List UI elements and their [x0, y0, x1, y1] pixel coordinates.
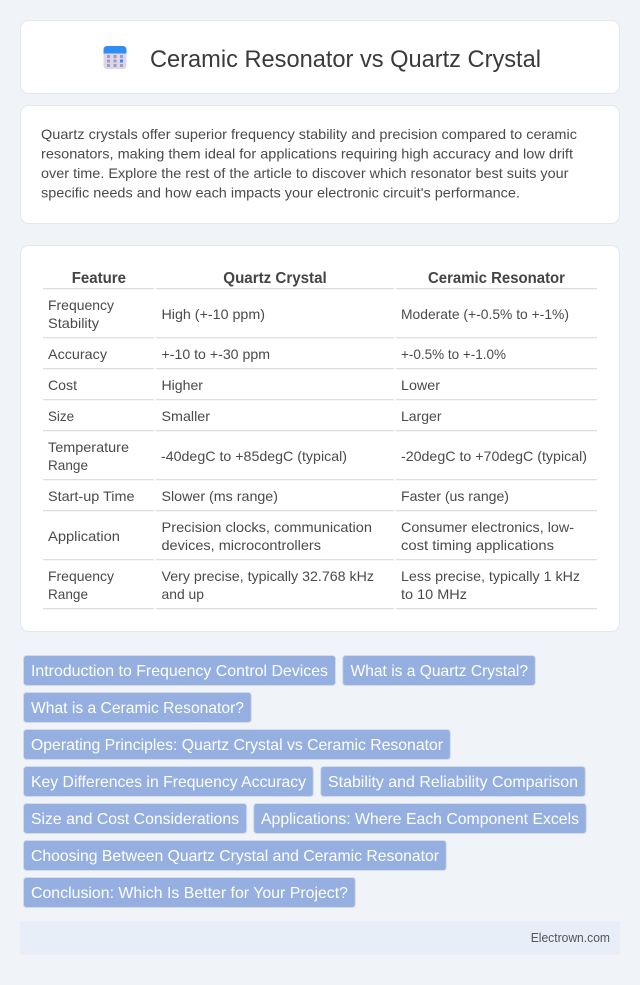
- tag: Stability and Reliability Comparison: [328, 774, 578, 791]
- row: cost: [48, 377, 440, 393]
- row: frequency stability: Stability: [48, 315, 99, 331]
- tag: [24, 730, 450, 760]
- row: start-up time: [48, 488, 509, 504]
- tag: Applications: Where Each Component Excels: [261, 811, 579, 828]
- row: frequency range: Range: [48, 586, 88, 602]
- row: start-up time: Start-up Time: [48, 488, 135, 504]
- tag: What is a Quartz Crystal?: [350, 663, 528, 680]
- row: frequency range: Less precise, typically 1 kHz: [401, 568, 580, 584]
- text block: introduction: Quartz crystals offer superior frequency stability and precision compared to ceramic: [41, 126, 577, 142]
- row: accuracy: +-10 to +-30 ppm: [162, 346, 270, 362]
- table header: Quartz Crystal: [223, 270, 327, 287]
- row: cost: Higher: [162, 377, 203, 393]
- tag list: article sections: [24, 656, 586, 908]
- row: application: devices, microcontrollers: [162, 537, 321, 553]
- text block: introduction: over time. Explore the rest of the article to discover which resonator best suits your: [41, 165, 569, 181]
- row: accuracy: Accuracy: [48, 346, 107, 362]
- row: frequency range: Frequency: [48, 568, 114, 584]
- tag: Choosing Between Quartz Crystal and Ceramic Resonator: [31, 848, 440, 865]
- tag: [254, 804, 586, 834]
- text block: introduction: specific needs and how each impacts your electronic circuit's performance.: [41, 184, 520, 200]
- tag: Conclusion: Which Is Better for Your Project?: [31, 885, 348, 902]
- tag: [343, 656, 535, 686]
- row: size: [48, 408, 442, 424]
- footer: Electrown.com: [531, 930, 610, 945]
- row: application: Consumer electronics, low-: [401, 519, 574, 535]
- row: frequency range: [48, 568, 580, 602]
- row: start-up time: Slower (ms range): [162, 488, 278, 504]
- row: cost: Lower: [401, 377, 440, 393]
- row: temperature range: Temperature: [48, 439, 129, 455]
- row: application: Precision clocks, communication: [162, 519, 372, 535]
- tag: What is a Ceramic Resonator?: [31, 700, 244, 717]
- text block: introduction: [41, 126, 577, 200]
- tag: [24, 766, 313, 796]
- tag: [24, 692, 251, 722]
- tag: [24, 804, 247, 834]
- row: cost: Cost: [48, 377, 77, 393]
- row: accuracy: [48, 346, 506, 362]
- row: temperature range: -40degC to +85degC (typical): [161, 448, 347, 464]
- icon: calendar: [104, 46, 126, 69]
- row: frequency stability: Frequency: [48, 297, 114, 313]
- row: temperature range: -20degC to +70degC (typical): [401, 448, 587, 464]
- row: frequency stability: [48, 297, 569, 331]
- panel: header: [20, 20, 620, 94]
- tag: Introduction to Frequency Control Devices: [31, 663, 328, 680]
- row: temperature range: [48, 439, 587, 473]
- title: Ceramic Resonator vs Quartz Crystal: [150, 46, 541, 73]
- row: application: [48, 519, 574, 553]
- row: application: Application: [48, 528, 120, 544]
- row: accuracy: +-0.5% to +-1.0%: [401, 346, 506, 362]
- row: start-up time: Faster (us range): [401, 488, 509, 504]
- tag: [24, 878, 355, 908]
- row: frequency range: Very precise, typically 32.768 kHz: [162, 568, 374, 584]
- row: size: Larger: [401, 408, 442, 424]
- tag: [321, 766, 585, 796]
- row: size: Size: [48, 408, 74, 424]
- row: temperature range: Range: [48, 457, 88, 473]
- row: size: Smaller: [162, 408, 210, 424]
- tag: Size and Cost Considerations: [31, 811, 239, 828]
- row: frequency range: and up: [162, 586, 204, 602]
- table header: Feature: [72, 270, 126, 287]
- row: frequency stability: Moderate (+-0.5% to +-1%): [401, 306, 569, 322]
- tag: Key Differences in Frequency Accuracy: [31, 774, 306, 791]
- row: application: cost timing applications: [401, 537, 554, 553]
- row: frequency range: to 10 MHz: [401, 586, 467, 602]
- footer: [20, 921, 620, 955]
- text block: introduction: resonators, making them ideal for applications requiring high accuracy and low drift: [41, 146, 573, 162]
- row: frequency stability: High (+-10 ppm): [162, 306, 265, 322]
- table header: Ceramic Resonator: [428, 270, 565, 287]
- tag: [24, 840, 446, 870]
- panel: introduction: [20, 106, 620, 224]
- table header: [72, 270, 565, 287]
- panel: comparison table: [20, 246, 620, 632]
- tag: Operating Principles: Quartz Crystal vs Ceramic Resonator: [31, 737, 444, 754]
- tag: [24, 656, 336, 686]
